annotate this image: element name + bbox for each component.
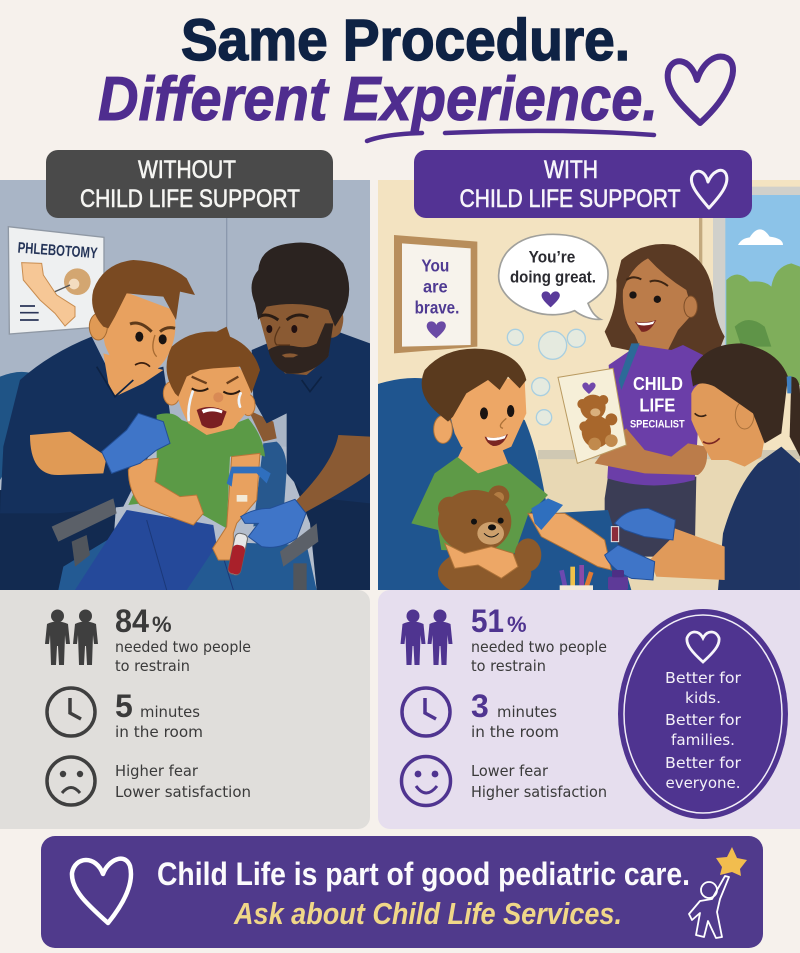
speech bubble: doing great. — [510, 268, 596, 287]
stat: 84% — [115, 603, 251, 675]
stat: 51% — [471, 603, 607, 675]
icon: two people grey — [45, 610, 98, 665]
banner: call to action — [41, 836, 763, 948]
chair — [52, 442, 318, 590]
chair back — [0, 372, 29, 480]
panel: without stats — [0, 590, 370, 829]
right nurse — [248, 242, 370, 590]
window — [713, 187, 800, 387]
poster: phlebotomy — [8, 227, 104, 334]
header: without child life support — [46, 150, 333, 218]
title — [98, 8, 733, 141]
title: Same Procedure. — [181, 8, 630, 73]
header: with child life support: CHILD LIFE SUPPORT — [460, 185, 680, 213]
badge: better for everyone: Better for — [665, 754, 742, 772]
poster: phlebotomy: PHLEBOTOMY — [17, 240, 98, 262]
stat: 51%: 51 — [471, 603, 504, 639]
banner text: Child Life is part of good pediatric care. — [157, 856, 690, 892]
speech bubble — [499, 234, 608, 319]
framed poster: you are brave: are — [423, 277, 448, 297]
stat: 3 minutes — [471, 688, 559, 741]
stat: lower fear: Lower fear — [471, 762, 549, 780]
icon: banner heart — [72, 859, 131, 923]
stat: higher fear: Higher fear — [115, 762, 199, 780]
title: Different Experience. — [98, 65, 658, 134]
child life specialist — [595, 244, 725, 557]
stat: 84%: 84 — [115, 603, 149, 639]
stat: 51%: to restrain — [471, 657, 546, 675]
badge: better for everyone: everyone. — [666, 774, 740, 792]
stat: 5 minutes: minutes — [140, 703, 200, 721]
stat: 5 minutes: 5 — [115, 688, 133, 724]
framed poster: you are brave: You — [421, 256, 449, 276]
child life specialist: SPECIALIST — [630, 418, 685, 430]
badge: better for everyone: families. — [671, 731, 735, 749]
icon: happy face — [402, 756, 450, 806]
stat: 84%: to restrain — [115, 657, 190, 675]
framed poster: you are brave: brave. — [415, 297, 459, 317]
icon: child reaching — [689, 876, 729, 938]
crying boy — [75, 327, 271, 590]
panel: without child life scene — [0, 180, 370, 590]
nurse — [605, 343, 800, 590]
stat: lower fear: Higher satisfaction — [471, 783, 607, 801]
left nurse — [0, 260, 195, 590]
icon: sad face — [47, 757, 95, 805]
panel: with stats — [378, 590, 800, 829]
child life specialist: CHILD — [633, 373, 683, 394]
stat: 84%: % — [152, 612, 172, 637]
child life specialist: LIFE — [639, 395, 675, 416]
icon: clock purple — [402, 688, 450, 736]
header: without child life support: CHILD LIFE SUPPORT — [80, 185, 300, 213]
badge: better for everyone: Better for — [665, 711, 742, 729]
chair — [378, 378, 631, 590]
stat: higher fear — [115, 762, 251, 801]
framed poster: you are brave — [394, 235, 477, 353]
banner text — [157, 856, 690, 931]
stat: 84%: needed two people — [115, 638, 251, 656]
stat: 3 minutes: minutes — [497, 703, 557, 721]
gloves and blood tube — [102, 413, 306, 576]
stat: 3 minutes: 3 — [471, 688, 489, 724]
badge: better for everyone: kids. — [685, 689, 721, 707]
stat: lower fear — [471, 762, 607, 801]
icon: clock grey — [47, 688, 95, 736]
header: without child life support: WITHOUT — [138, 156, 236, 184]
stat: 5 minutes: in the room — [115, 723, 203, 741]
icon: two people purple — [400, 610, 452, 665]
stat: 51%: % — [507, 612, 527, 637]
badge: better for everyone: Better for — [665, 669, 742, 687]
banner text: Ask about Child Life Services. — [233, 896, 622, 931]
pencil cup and bottle — [559, 565, 628, 590]
speech bubble: You’re — [529, 248, 575, 267]
bear card — [558, 368, 626, 463]
header: with child life support: WITH — [544, 156, 598, 184]
badge: better for everyone — [618, 609, 788, 819]
panel: with child life scene — [378, 180, 800, 598]
icon: star — [716, 847, 747, 876]
header: with child life support — [414, 150, 752, 218]
stat: higher fear: Lower satisfaction — [115, 783, 251, 801]
stat: 51%: needed two people — [471, 638, 607, 656]
teddy bear — [438, 485, 541, 598]
soap bubbles — [507, 329, 585, 425]
happy boy — [411, 349, 611, 598]
stat: 3 minutes: in the room — [471, 723, 559, 741]
gloves — [605, 508, 675, 580]
stat: 5 minutes — [115, 688, 203, 741]
